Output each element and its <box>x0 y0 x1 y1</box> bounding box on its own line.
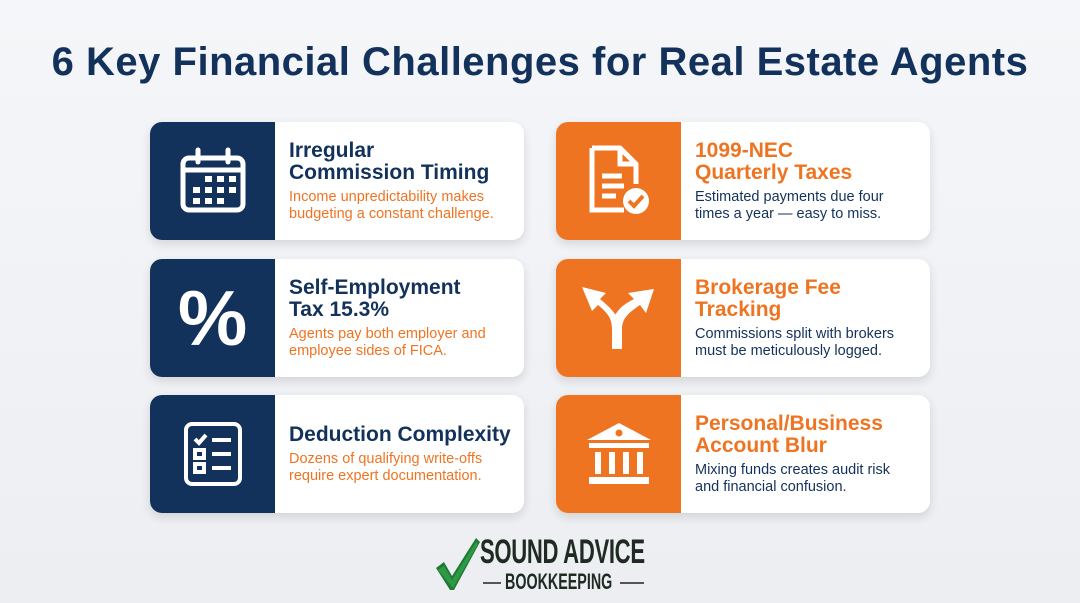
card: brokerage fee tracking <box>556 259 930 377</box>
text <box>695 276 894 358</box>
text: Tax 15.3% <box>289 298 389 320</box>
card: irregular commission timing <box>150 122 524 240</box>
text: Income unpredictability makes <box>289 188 484 204</box>
text: budgeting a constant challenge. <box>289 206 494 222</box>
text <box>695 412 890 494</box>
icon: calendar <box>150 122 275 240</box>
text: Commissions split with brokers <box>695 326 894 342</box>
text: Brokerage Fee <box>695 276 841 298</box>
logo text: SOUND ADVICE <box>480 533 645 571</box>
text: Quarterly Taxes <box>695 160 852 184</box>
text: 1099-NEC <box>695 138 793 162</box>
text <box>695 138 884 222</box>
text: must be meticulously logged. <box>695 342 882 358</box>
card: personal/business account blur <box>556 395 930 513</box>
title: 6 Key Financial Challenges for Real Estate Agents <box>52 40 1028 84</box>
text: Self-Employment <box>289 276 461 298</box>
text: Mixing funds creates audit risk <box>695 462 890 478</box>
card: self-employment tax <box>150 259 524 377</box>
text: Estimated payments due four <box>695 188 884 204</box>
icon: percent <box>150 259 275 377</box>
icon: split arrow <box>556 259 681 377</box>
text: Commission Timing <box>289 160 489 184</box>
text: Tracking <box>695 298 781 320</box>
text: and financial confusion. <box>695 478 847 494</box>
logo: sound advice bookkeeping <box>436 533 645 594</box>
logo: sound advice bookkeeping: BOOKKEEPING <box>505 569 612 594</box>
text: Deduction Complexity <box>289 422 511 446</box>
icon: checklist <box>150 395 275 513</box>
text: Agents pay both employer and <box>289 326 486 342</box>
text: require expert documentation. <box>289 468 482 484</box>
text <box>289 422 511 484</box>
text: Personal/Business <box>695 412 883 434</box>
icon: percent: % <box>178 274 247 362</box>
card: deduction complexity <box>150 395 524 513</box>
icon: bank <box>556 395 681 513</box>
text: Dozens of qualifying write-offs <box>289 450 482 466</box>
text: times a year — easy to miss. <box>695 206 881 222</box>
text: Irregular <box>289 138 374 162</box>
text <box>289 138 494 222</box>
text: Account Blur <box>695 434 827 456</box>
text: employee sides of FICA. <box>289 342 447 358</box>
icon: document with check <box>556 122 681 240</box>
icon: green checkmark <box>436 538 480 590</box>
card: 1099-NEC quarterly taxes <box>556 122 930 240</box>
text <box>289 276 486 358</box>
